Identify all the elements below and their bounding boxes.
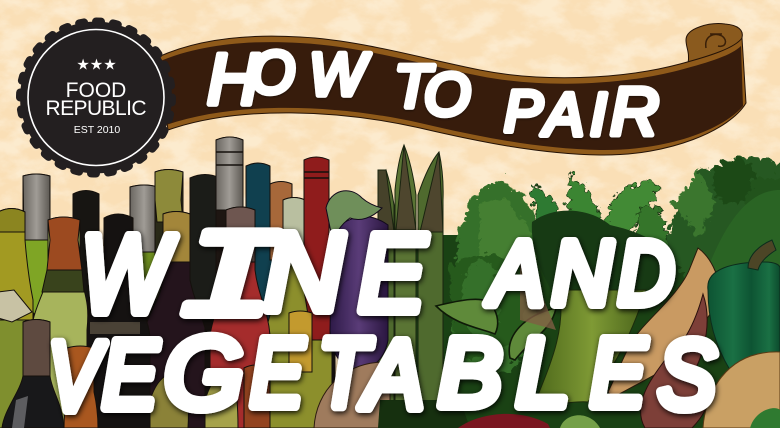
shallot <box>641 294 709 428</box>
leek stalks <box>538 290 646 403</box>
heading: how to pair: I <box>590 81 607 148</box>
bottle: brown capsule black body <box>2 320 64 428</box>
heading: how to pair: R <box>610 74 659 150</box>
bottle: yellow capsule dark <box>145 212 205 428</box>
title line two: L <box>516 318 570 427</box>
white ring <box>28 30 164 166</box>
title line one: I <box>178 212 282 352</box>
main title: wine and vegetables <box>48 211 716 428</box>
scroll end <box>686 24 742 64</box>
heading: how to pair: O <box>424 61 471 128</box>
bottle: olive capsule <box>155 170 183 300</box>
title line two: G <box>164 316 243 428</box>
heading: how to pair: W <box>309 41 371 108</box>
bottle: rust capsule front right <box>244 365 270 428</box>
title line one: W <box>81 213 177 336</box>
bottle: black back <box>73 190 99 300</box>
dark bottom greens and red <box>378 400 780 428</box>
kale <box>664 154 780 280</box>
title line two: V <box>48 322 107 428</box>
bottle: orange capsule light green <box>33 217 88 428</box>
bottle: silver capsule olive <box>130 185 158 300</box>
heading: how to pair: P <box>504 79 543 144</box>
title line one: N <box>552 224 613 324</box>
stars: ★★★ <box>76 56 117 74</box>
ribbon body <box>158 36 746 155</box>
vegetables <box>314 145 780 428</box>
logo text: REPUBLIC <box>46 97 146 120</box>
long leaves <box>436 299 556 360</box>
heading: how to pair: T <box>394 53 435 120</box>
ribbon centre <box>158 42 743 150</box>
title line two: E <box>590 318 647 427</box>
bottle: orange capsule front <box>64 346 98 428</box>
title line one: N <box>264 211 344 334</box>
bottle: teal <box>240 163 282 330</box>
dark leek leaves <box>532 211 668 310</box>
badge: food republic <box>20 22 172 174</box>
eggplant <box>326 191 388 372</box>
established: EST 2010 <box>74 124 120 136</box>
bottle: black capsule <box>190 174 220 300</box>
title line one: D <box>618 224 674 324</box>
leafy greens <box>446 178 534 370</box>
title line two: E <box>250 318 305 427</box>
bottle: black wide with label <box>78 214 150 428</box>
bottle: red body brown capsule <box>210 207 270 428</box>
title line one: E <box>358 212 428 335</box>
heading: how to pair: O <box>250 39 295 106</box>
wine bottles <box>0 137 335 428</box>
onion <box>314 362 390 428</box>
heading: how to pair: A <box>541 81 584 148</box>
badge seal <box>20 22 172 174</box>
bottle: silver capsule green <box>23 174 50 314</box>
parsnip <box>608 248 719 398</box>
title line one: A <box>486 224 544 324</box>
bottle: red <box>304 157 332 340</box>
title line two: E <box>102 320 159 428</box>
ribbon banner <box>158 24 746 155</box>
dark base behind bottles <box>0 290 335 428</box>
bottle: pale capsule olive body <box>262 198 332 428</box>
bottle: grey capsule <box>216 137 243 300</box>
title line two: B <box>438 318 502 427</box>
logo text: FOOD <box>66 79 126 102</box>
root in centre <box>520 240 556 330</box>
bottle: lower olive pair <box>150 376 238 428</box>
title line two: A <box>359 320 424 428</box>
asparagus <box>378 145 443 428</box>
bottle: yellow-olive with label <box>0 208 33 428</box>
lettuce right <box>700 190 780 290</box>
bottle: yellow capsule front <box>289 311 312 372</box>
bottle: copper capsule <box>270 182 292 260</box>
title line two: S <box>658 320 716 428</box>
title line two: T <box>318 318 373 427</box>
basil <box>528 174 666 246</box>
dark green backdrop <box>378 235 780 428</box>
heading: how to pair: H <box>207 40 260 120</box>
pepper <box>708 240 780 370</box>
turnip <box>703 352 780 428</box>
